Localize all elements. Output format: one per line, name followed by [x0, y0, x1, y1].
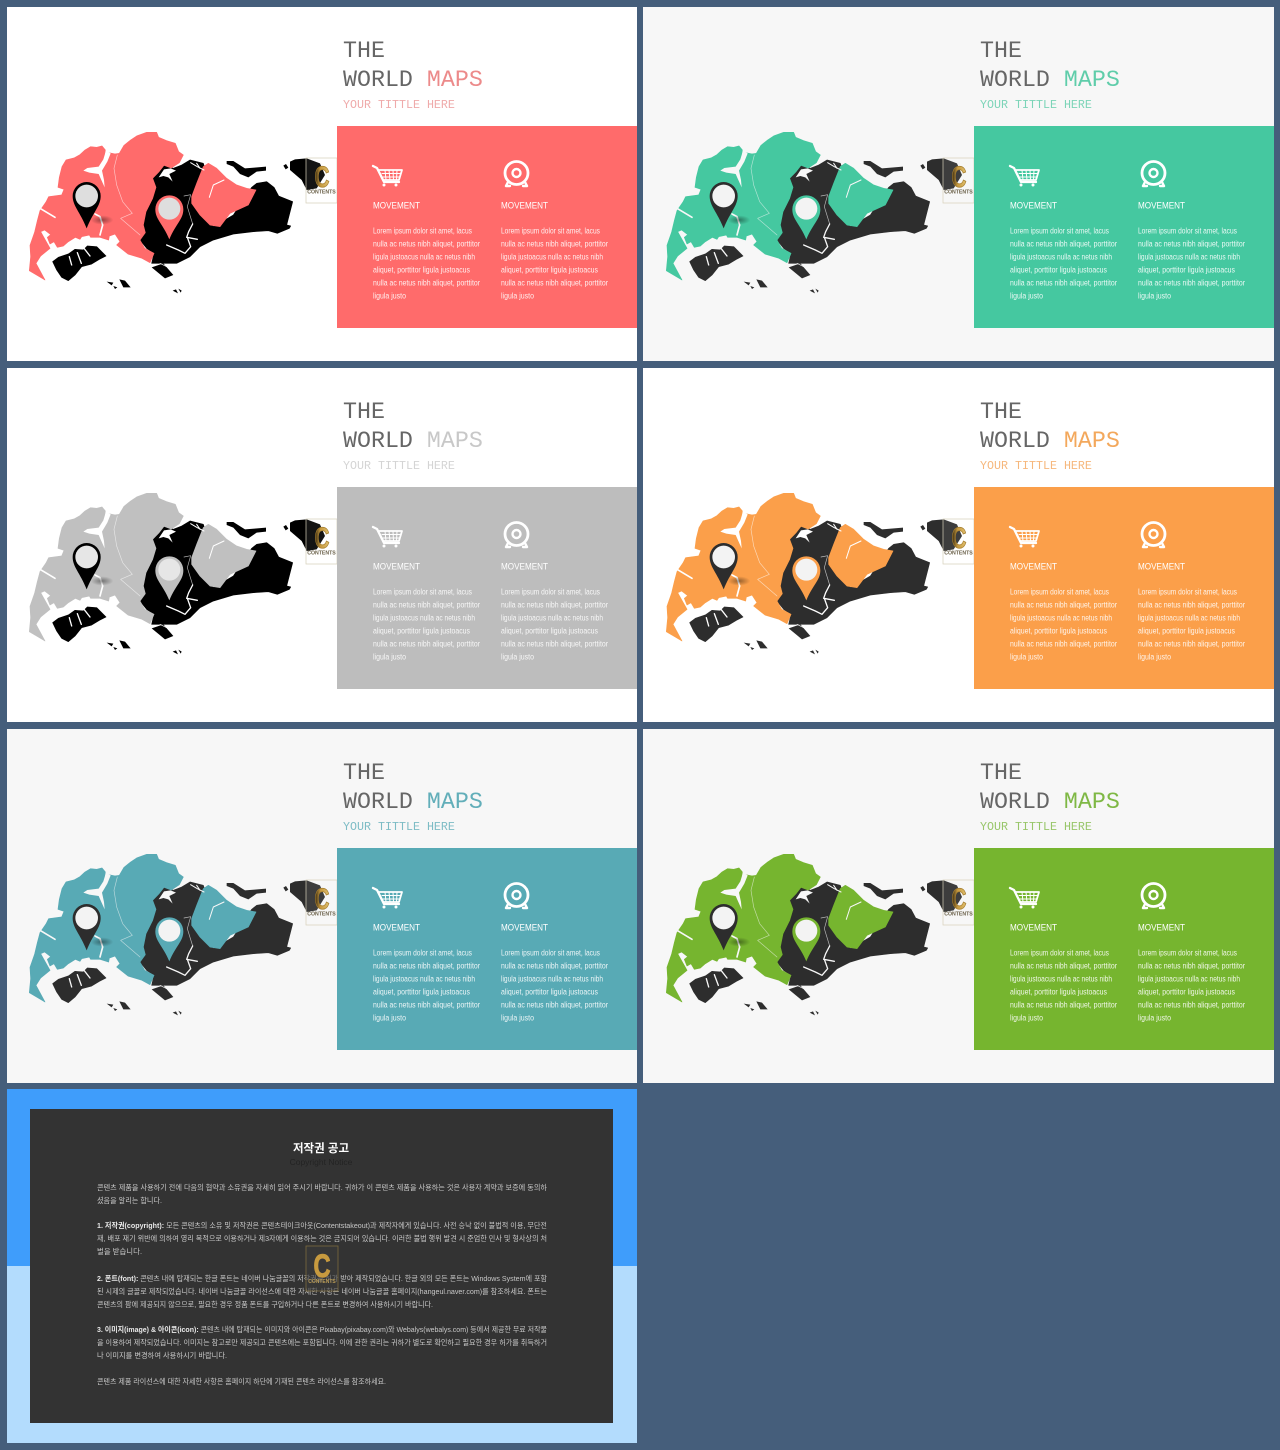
column 2 text	[1138, 922, 1245, 1022]
column 2 text	[501, 922, 608, 1022]
slide background	[7, 368, 637, 722]
column 2 text: nulla ac netus nibh aliquet, porttitor	[501, 640, 608, 648]
slide background	[643, 368, 1274, 722]
watermark logo	[306, 880, 337, 925]
column 2 text: Lorem ipsum dolor sit amet, lacus	[1138, 588, 1237, 596]
column 2 text: ligula justo	[501, 292, 535, 300]
column 2 text: nulla ac netus nibh aliquet, porttitor	[501, 1000, 608, 1010]
watermark logo: CONTENTS	[308, 1279, 336, 1285]
slide 7: copyright notice	[7, 1089, 637, 1443]
intro paragraph: 셨음을 알리는 합니다.	[97, 1195, 162, 1205]
column 2 text: aliquet, porttitor ligula justoacus	[501, 988, 598, 996]
column 2 text: ligula justo	[1138, 292, 1172, 300]
slide background	[643, 7, 1274, 361]
column 2 text: ligula justoacus nulla ac netus nibh	[501, 974, 603, 984]
title: THE	[343, 38, 385, 64]
column 1 text: MOVEMENT	[1010, 200, 1058, 210]
column 2 text: nulla ac netus nibh aliquet, porttitor	[1138, 240, 1245, 248]
watermark logo: C	[952, 883, 966, 916]
map with pins	[666, 132, 962, 293]
column 1 text: nulla ac netus nibh aliquet, porttitor	[1010, 278, 1117, 288]
icon: cart	[1010, 527, 1039, 548]
column 2 text: ligula justoacus nulla ac netus nibh	[1138, 614, 1240, 622]
section 3: image and icon: 나 이미지를 변경하여 사용하시기 바랍니다.	[97, 1350, 227, 1360]
icon: target	[1142, 522, 1165, 547]
icon: target	[1142, 162, 1165, 186]
column 2 text: aliquet, porttitor ligula justoacus	[1138, 266, 1235, 274]
watermark logo	[943, 880, 974, 925]
column 1 text: Lorem ipsum dolor sit amet, lacus	[373, 588, 472, 596]
column 1 text: MOVEMENT	[373, 562, 421, 572]
column 2 text: aliquet, porttitor ligula justoacus	[501, 626, 598, 636]
column 1 text	[1010, 562, 1117, 662]
title	[343, 399, 483, 454]
column 1 text: Lorem ipsum dolor sit amet, lacus	[1010, 588, 1109, 596]
column 1 text: MOVEMENT	[373, 922, 421, 932]
column 1 text: MOVEMENT	[1010, 922, 1058, 932]
column 1 text: aliquet, porttitor ligula justoacus	[1010, 266, 1107, 274]
column 2 text: ligula justo	[1138, 1014, 1172, 1022]
column 2 text: nulla ac netus nibh aliquet, porttitor	[1138, 640, 1245, 648]
watermark logo	[943, 519, 974, 564]
column 2 text: ligula justoacus nulla ac netus nibh	[1138, 974, 1240, 984]
column 1 text: ligula justo	[1010, 292, 1044, 300]
column 2 text: ligula justo	[501, 652, 535, 662]
column 1 text: Lorem ipsum dolor sit amet, lacus	[1010, 226, 1109, 236]
title: THE	[343, 399, 385, 425]
watermark logo: C	[314, 522, 330, 555]
info panel	[974, 487, 1274, 689]
column 1 text: ligula justoacus nulla ac netus nibh	[1010, 252, 1112, 262]
icon: cart	[373, 527, 402, 548]
notice heading: 저작권 공고	[293, 1141, 349, 1155]
map with pins	[29, 854, 325, 1015]
column 2 text: aliquet, porttitor ligula justoacus	[1138, 626, 1235, 636]
subtitle: YOUR TITTLE HERE	[343, 98, 455, 112]
column 1 text: aliquet, porttitor ligula justoacus	[373, 266, 470, 274]
section 1: copyright: 재, 배포 재기 위반에 의하여 영리 목적으로 이용하거나 제3자에게 이용하는 것은 금지되어 있습니다. 이러한 불법 행위 발견 시 준엄한 민사 및 형사상의 처	[97, 1233, 547, 1243]
title: WORLD MAPS	[343, 67, 483, 93]
column 1 text: nulla ac netus nibh aliquet, porttitor	[1010, 1000, 1117, 1010]
column 2 text: MOVEMENT	[1138, 922, 1186, 932]
column 1 text: nulla ac netus nibh aliquet, porttitor	[373, 1000, 480, 1010]
column 2 text: nulla ac netus nibh aliquet, porttitor	[1138, 1000, 1245, 1010]
title: WORLD MAPS	[980, 428, 1120, 454]
watermark logo: C	[952, 522, 966, 555]
column 1 text: ligula justo	[1010, 652, 1044, 662]
column 1 text: ligula justo	[373, 292, 407, 300]
watermark logo: C	[314, 161, 330, 194]
slide 6: green	[643, 729, 1274, 1083]
column 1 text: MOVEMENT	[1010, 562, 1058, 572]
column 2 text: ligula justoacus nulla ac netus nibh	[1138, 252, 1240, 262]
info panel	[337, 848, 637, 1050]
column 1 text: ligula justoacus nulla ac netus nibh	[373, 974, 475, 984]
subtitle: YOUR TITTLE HERE	[980, 820, 1092, 834]
slide 1: coral	[7, 7, 637, 361]
column 2 text	[501, 200, 608, 300]
column 1 text: nulla ac netus nibh aliquet, porttitor	[1010, 600, 1117, 610]
icon: target	[505, 884, 528, 908]
subtitle: YOUR TITTLE HERE	[980, 459, 1092, 473]
column 1 text: ligula justoacus nulla ac netus nibh	[1010, 974, 1112, 984]
map with pins	[666, 493, 962, 654]
column 2 text: MOVEMENT	[501, 562, 549, 572]
title: WORLD MAPS	[343, 789, 483, 815]
slide background	[7, 729, 637, 1083]
section 3: image and icon: 을 이용하여 제작되었습니다. 이미지는 참고로만 제공되고 콘텐츠에는 포함됩니다. 이에 관한 권리는 귀하가 별도로 확인하고 필요한 경우 허가를 취득하거	[97, 1337, 547, 1347]
icon: cart	[1010, 166, 1039, 186]
title: WORLD MAPS	[980, 67, 1120, 93]
watermark logo	[306, 519, 337, 564]
column 2 text: ligula justoacus nulla ac netus nibh	[501, 252, 603, 262]
slide 2: teal green	[643, 7, 1274, 361]
column 1 text: aliquet, porttitor ligula justoacus	[1010, 988, 1107, 996]
title	[980, 399, 1120, 454]
column 2 text: nulla ac netus nibh aliquet, porttitor	[1138, 278, 1245, 288]
title	[980, 760, 1120, 815]
column 2 text: MOVEMENT	[1138, 562, 1186, 572]
watermark logo	[306, 158, 337, 203]
subtitle: YOUR TITTLE HERE	[343, 820, 455, 834]
icon: target	[505, 162, 528, 186]
column 1 text: Lorem ipsum dolor sit amet, lacus	[373, 226, 472, 236]
column 2 text: aliquet, porttitor ligula justoacus	[501, 266, 598, 274]
column 2 text	[501, 562, 608, 662]
title	[980, 38, 1120, 93]
info panel	[337, 126, 637, 328]
section 1: copyright: 1. 저작권(copyright): 모든 콘텐츠의 소유 및 저작권은 콘텐츠테이크아웃(Contentstakeout)과 제작자에게 있습니다. 사전 승낙 없이 불법적 이용, 무단전	[97, 1220, 547, 1230]
column 1 text: nulla ac netus nibh aliquet, porttitor	[373, 640, 480, 648]
title: THE	[980, 38, 1022, 64]
column 1 text: Lorem ipsum dolor sit amet, lacus	[1010, 948, 1109, 958]
column 1 text	[373, 200, 480, 300]
column 1 text: nulla ac netus nibh aliquet, porttitor	[1010, 240, 1117, 248]
column 1 text	[1010, 922, 1117, 1022]
info panel	[974, 848, 1274, 1050]
column 1 text: aliquet, porttitor ligula justoacus	[373, 626, 470, 636]
subtitle: YOUR TITTLE HERE	[980, 98, 1092, 112]
title: WORLD MAPS	[980, 789, 1120, 815]
watermark logo: CONTENTS	[944, 190, 973, 196]
intro paragraph: 콘텐츠 제품을 사용하기 전에 다음의 협약과 소유권을 자세히 읽어 주시기 바랍니다. 귀하가 이 콘텐츠 제품을 사용하는 것은 사용자 계약과 보증에 동의하	[97, 1182, 547, 1192]
section 1: copyright	[97, 1220, 547, 1256]
column 2 text: Lorem ipsum dolor sit amet, lacus	[1138, 226, 1237, 236]
watermark logo: C	[314, 883, 330, 916]
column 1 text: ligula justoacus nulla ac netus nibh	[1010, 614, 1112, 622]
title: THE	[980, 760, 1022, 786]
column 2 text	[1138, 562, 1245, 662]
column 2 text	[1138, 200, 1245, 300]
column 1 text: nulla ac netus nibh aliquet, porttitor	[373, 278, 480, 288]
closing line: 콘텐츠 제품 라이선스에 대한 자세한 사항은 홈페이지 하단에 기재된 콘텐츠 라이선스를 참조하세요.	[97, 1376, 386, 1386]
slide 5: blue teal	[7, 729, 637, 1083]
section 2: font: 된 시제의 글꼴로 제작되었습니다. 네이버 나눔글꼴 라이선스에 대한 자세한 사항은 네이버 나눔글꼴 홈페이지(hangeul.naver.com)를 참조하세요. 폰트는	[97, 1286, 547, 1296]
column 1 text: nulla ac netus nibh aliquet, porttitor	[1010, 640, 1117, 648]
column 1 text: Lorem ipsum dolor sit amet, lacus	[373, 948, 472, 958]
slide 3: grey	[7, 368, 637, 722]
map with pins	[29, 493, 325, 654]
column 1 text: ligula justo	[1010, 1014, 1044, 1022]
column 1 text	[373, 922, 480, 1022]
light blue lower background	[7, 1266, 637, 1443]
column 2 text: Lorem ipsum dolor sit amet, lacus	[1138, 948, 1237, 958]
column 2 text: nulla ac netus nibh aliquet, porttitor	[501, 240, 608, 248]
info panel	[974, 126, 1274, 328]
column 2 text: ligula justo	[501, 1014, 535, 1022]
column 2 text: nulla ac netus nibh aliquet, porttitor	[1138, 600, 1245, 610]
column 1 text: ligula justoacus nulla ac netus nibh	[373, 252, 475, 262]
column 2 text: MOVEMENT	[501, 922, 549, 932]
section 2: font: 2. 폰트(font): 콘텐츠 내에 탑재되는 한글 폰트는 네이버 나눔글꼴의 저작권을 허가 받아 제작되었습니다. 한글 외의 모든 폰트는 Windows System에 포함	[97, 1273, 547, 1283]
intro paragraph	[97, 1182, 547, 1205]
section 2: font	[97, 1273, 547, 1309]
column 2 text: MOVEMENT	[1138, 200, 1186, 210]
column 2 text: nulla ac netus nibh aliquet, porttitor	[501, 278, 608, 288]
column 1 text: MOVEMENT	[373, 200, 421, 210]
column 2 text: nulla ac netus nibh aliquet, porttitor	[501, 600, 608, 610]
slide background	[7, 7, 637, 361]
map with pins	[666, 854, 962, 1015]
watermark logo: C	[314, 1248, 330, 1284]
column 2 text: nulla ac netus nibh aliquet, porttitor	[501, 962, 608, 970]
slide 4: orange	[643, 368, 1274, 722]
column 1 text: ligula justo	[373, 652, 407, 662]
column 1 text: aliquet, porttitor ligula justoacus	[1010, 626, 1107, 636]
dark notice panel	[30, 1109, 613, 1423]
watermark logo	[943, 158, 974, 203]
column 1 text: ligula justo	[373, 1014, 407, 1022]
column 2 text: ligula justoacus nulla ac netus nibh	[501, 614, 603, 622]
section 3: image and icon: 3. 이미지(image) & 아이콘(icon): 콘텐츠 내에 탑재되는 이미지와 아이콘은 Pixabay(pixabay.com)와 Webalys(webalys.com) 등에서 제공한 무료 저작물	[97, 1324, 547, 1334]
title: WORLD MAPS	[343, 428, 483, 454]
icon: target	[1142, 884, 1165, 908]
watermark logo: C	[952, 161, 966, 194]
blue upper background	[7, 1089, 637, 1266]
column 1 text: ligula justoacus nulla ac netus nibh	[373, 614, 475, 622]
column 2 text: aliquet, porttitor ligula justoacus	[1138, 988, 1235, 996]
column 1 text	[373, 562, 480, 662]
column 2 text: Lorem ipsum dolor sit amet, lacus	[501, 226, 600, 236]
icon: cart	[373, 888, 402, 908]
column 2 text: ligula justo	[1138, 652, 1172, 662]
title: THE	[980, 399, 1022, 425]
column 2 text: Lorem ipsum dolor sit amet, lacus	[501, 948, 600, 958]
notice subheading: Copyright Notice	[290, 1157, 353, 1167]
watermark logo: CONTENTS	[944, 912, 973, 918]
section 1: copyright: 벌을 받습니다.	[97, 1246, 142, 1256]
watermark logo: CONTENTS	[307, 912, 336, 918]
column 2 text: nulla ac netus nibh aliquet, porttitor	[1138, 962, 1245, 970]
watermark logo	[306, 1246, 338, 1291]
title	[343, 760, 483, 815]
column 1 text: nulla ac netus nibh aliquet, porttitor	[373, 240, 480, 248]
column 1 text: aliquet, porttitor ligula justoacus	[373, 988, 470, 996]
section 2: font: 콘텐츠의 팜에 제공되지 않으므로, 필요한 경우 정품 폰트를 구입하거나 다른 폰트로 변경하여 사용하시기 바랍니다.	[97, 1299, 433, 1309]
icon: target	[505, 522, 528, 547]
column 1 text	[1010, 200, 1117, 300]
map with pins	[29, 132, 325, 293]
column 2 text: Lorem ipsum dolor sit amet, lacus	[501, 588, 600, 596]
column 1 text: nulla ac netus nibh aliquet, porttitor	[373, 962, 480, 970]
subtitle: YOUR TITTLE HERE	[343, 459, 455, 473]
column 2 text: MOVEMENT	[501, 200, 549, 210]
watermark logo: CONTENTS	[944, 550, 973, 556]
title	[343, 38, 483, 93]
icon: cart	[1010, 888, 1039, 908]
info panel	[337, 487, 637, 689]
column 1 text: nulla ac netus nibh aliquet, porttitor	[1010, 962, 1117, 970]
slide background	[643, 729, 1274, 1083]
column 1 text: nulla ac netus nibh aliquet, porttitor	[373, 600, 480, 610]
watermark logo: CONTENTS	[307, 190, 336, 196]
title: THE	[343, 760, 385, 786]
icon: cart	[373, 166, 402, 186]
section 3: image and icon	[97, 1324, 547, 1360]
watermark logo: CONTENTS	[307, 550, 336, 556]
